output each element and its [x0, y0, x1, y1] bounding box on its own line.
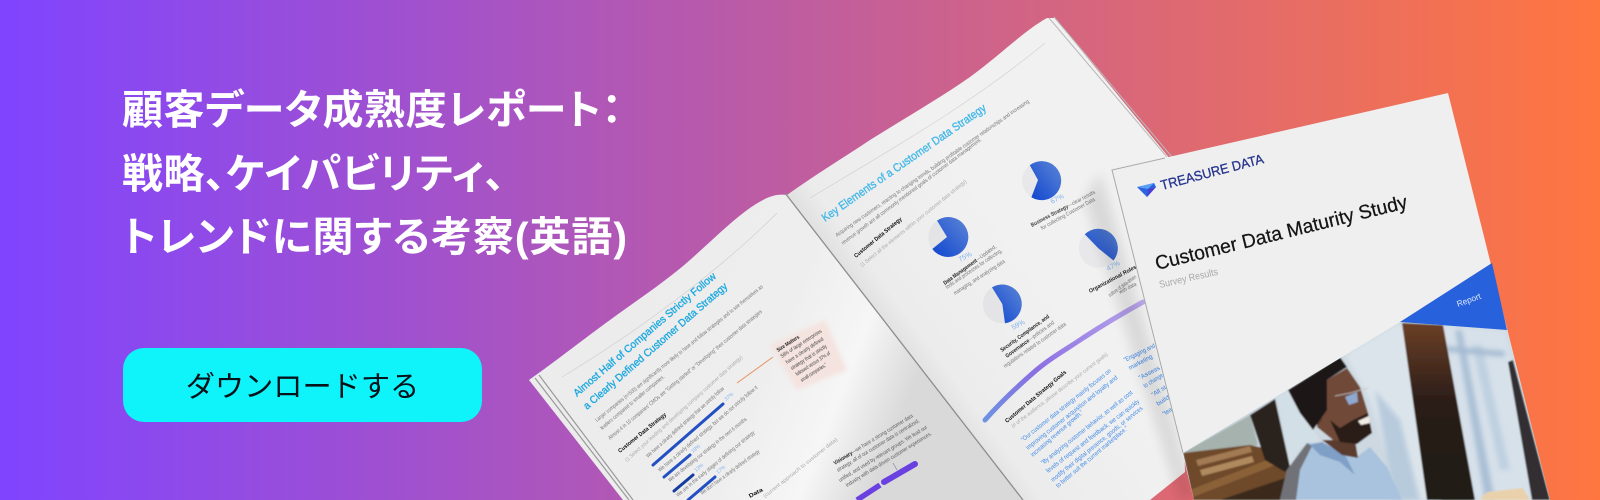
maturity bar: [857, 463, 915, 500]
goals quotes: [1020, 342, 1174, 490]
text block: visionary: strategy, all of our customer data is centralized,: [836, 418, 921, 474]
chart heading: customer data strategy: (1 Select your leading and developing company customer data strategy): [624, 355, 744, 463]
left page intro text: leaders compared to smaller companies.: [599, 374, 666, 432]
callout: size matters: have a clearly defined: [785, 337, 825, 366]
left page heading: Almost Half of Companies Strictly Follow: [571, 270, 719, 399]
pie chart: security and compliance: 59%: [1011, 319, 1026, 332]
pie chart: business strategy: for collecting Customer Data: [1040, 197, 1097, 232]
spine: [785, 193, 1023, 500]
section heading: customer data: Data: [748, 487, 765, 500]
pie chart: data management: [928, 217, 1007, 297]
callout: size matters: 58% of large enterprises: [780, 328, 824, 360]
title: 顧客データ成熟度レポート：: [122, 87, 622, 133]
download button: [123, 348, 482, 422]
open report booklet: [529, 17, 1185, 500]
panel: right page: [787, 17, 1185, 500]
title: [122, 87, 627, 260]
bar chart: strategy adoption: 37%: [723, 391, 735, 403]
callout: size matters: strategy that is strictly: [790, 344, 829, 372]
section heading: customer data: (current approach to customer data): [763, 437, 839, 500]
divider: goals gradient bar: [985, 302, 1143, 420]
cover title: Customer Data Maturity Study: [1153, 191, 1410, 275]
pie chart: data management: 75%: [958, 251, 973, 264]
man: [1280, 357, 1402, 500]
goals quotes: levels of request and feedback, we can quickly: [1045, 398, 1142, 475]
text block: visionary: industry with data-driven customer experiences.: [845, 431, 934, 489]
callout: size matters: [770, 320, 847, 390]
pie chart: organizational roles: 47%: [1106, 260, 1121, 273]
goals quotes: "Our customer data strategy mainly focuses on: [1020, 368, 1113, 444]
panel: report cover: [1112, 93, 1560, 500]
pie chart: data management: tools and processes for collecting,: [945, 248, 1004, 291]
pie chart: security and compliance: [983, 284, 1068, 370]
pie chart: business strategy: [1022, 161, 1097, 232]
bar chart: strategy adoption: 17%: [715, 464, 727, 476]
bar chart: strategy adoption: We don't have a clearly defined strategy: [700, 449, 761, 497]
goals quotes: marketing: [1128, 353, 1154, 372]
download button: ダウンロードする: [186, 370, 419, 404]
chart heading: strategy elements: (1 Select all the elements within your customer data strategy): [859, 179, 968, 269]
blue corner banner: [1400, 263, 1507, 330]
goals quotes: "Engaging and: [1123, 342, 1157, 364]
title: 戦略、ケイパビリティ、: [122, 151, 505, 197]
logo: treasure data: TREASURE DATA: [1159, 151, 1265, 193]
title: トレンドに関する考察(英語): [122, 214, 627, 260]
callout: size matters: small companies.": [800, 362, 828, 384]
goals quotes: increasing revenue growth.": [1030, 409, 1085, 459]
left page intro text: Almost 4 in 10 companies' CMOs are "Getting started" or "Developing" their customer data strategies: [607, 309, 764, 442]
pie chart: organizational roles: [1079, 229, 1138, 299]
report label: Report: [1455, 291, 1483, 309]
bar chart: strategy adoption: We have a clearly defined strategy, but we do not strictly follow it: [657, 385, 760, 474]
goals heading: (# of the audience, please describe your current goals): [1011, 352, 1110, 430]
window frame: [1402, 323, 1475, 500]
bar chart: strategy adoption: 19%: [690, 443, 702, 455]
goals quotes: "tea: [1161, 406, 1174, 418]
pie chart: security and compliance: Governance—policies and: [1005, 320, 1056, 360]
bar chart: strategy adoption: We have a clearly defined strategy that we strictly follow: [645, 386, 726, 459]
goals quotes: improving customer acquisition and loyalty and: [1025, 374, 1120, 452]
pie chart: business strategy: 67%: [1050, 193, 1065, 206]
callout: size matters: followed versus 37% of: [795, 351, 832, 378]
pie chart: business strategy: Business Strategy—clear results: [1030, 190, 1097, 229]
pie chart: security and compliance: Security, Compliance, and: [1000, 314, 1051, 354]
goals quotes: "By analyzing customer behavior, as well as cost: [1040, 389, 1134, 467]
bar chart: strategy adoption: We are developing our strategy in the next 6 months: [667, 417, 749, 484]
left page heading: a Clearly Defined Customer Data Strategy: [581, 280, 731, 412]
goals quotes: "Assess c: [1138, 362, 1166, 382]
arrow: callout connector: [737, 357, 773, 383]
right page heading: Key Elements of a Customer Data Strategy: [820, 102, 989, 224]
cover subtitle: Survey Results: [1158, 267, 1219, 291]
text block: visionary: Visionary—we have a strong customer data: [833, 413, 915, 467]
callout: size matters: Size Matters: [776, 334, 801, 354]
wall and shelf at left: [1183, 415, 1258, 455]
bar chart: strategy adoption: [645, 385, 761, 500]
pie chart: organizational roles: with data: [1117, 281, 1138, 296]
chart heading: strategy elements: Customer Data Strategy: [853, 216, 904, 260]
text block: visionary: unified, and used by relevant groups. We lead our: [838, 425, 929, 484]
goals quotes: build: [1155, 394, 1171, 408]
right page intro text: revenue growth are all commonly mentioned goals of customer data management.: [841, 137, 983, 247]
panel: left page: [529, 195, 1023, 500]
bar chart: strategy adoption: We are in the early stages of defining our strategy: [675, 430, 756, 499]
right page intro text: Acquiring new customers, reacting to changing trends, building profitable customer relationships and increasing: [835, 99, 1031, 239]
pie chart: security and compliance: regulations related to customer data: [1003, 321, 1068, 370]
goals quotes: to better suit the current marketplace.": [1055, 425, 1130, 490]
pie chart: data management: Data Management—Updated,: [943, 244, 998, 287]
left page intro text: Larger companies (n=500) are significantly more likely to have and follow strategies and to see themselves as: [594, 284, 765, 424]
goals quotes: to change: [1142, 372, 1165, 390]
bar chart: strategy adoption: 13%: [693, 462, 705, 474]
pie chart: organizational roles: culture of data-driven: [1108, 274, 1138, 299]
chart heading: customer data strategy: Customer Data Strategy: [617, 412, 668, 455]
shadow of cover on the open page: [1085, 172, 1195, 500]
goals quotes: modify their digital presence, goods, or services: [1050, 405, 1144, 484]
pie chart: data management: managing, and analyzing data: [953, 259, 1007, 297]
pie chart: organizational roles: Organizational Roles: [1088, 265, 1138, 295]
goals heading: Customer Data Strategy Goals: [1004, 370, 1068, 425]
cover photo: man at window: [1180, 320, 1560, 500]
goals quotes: "All st: [1150, 384, 1168, 399]
